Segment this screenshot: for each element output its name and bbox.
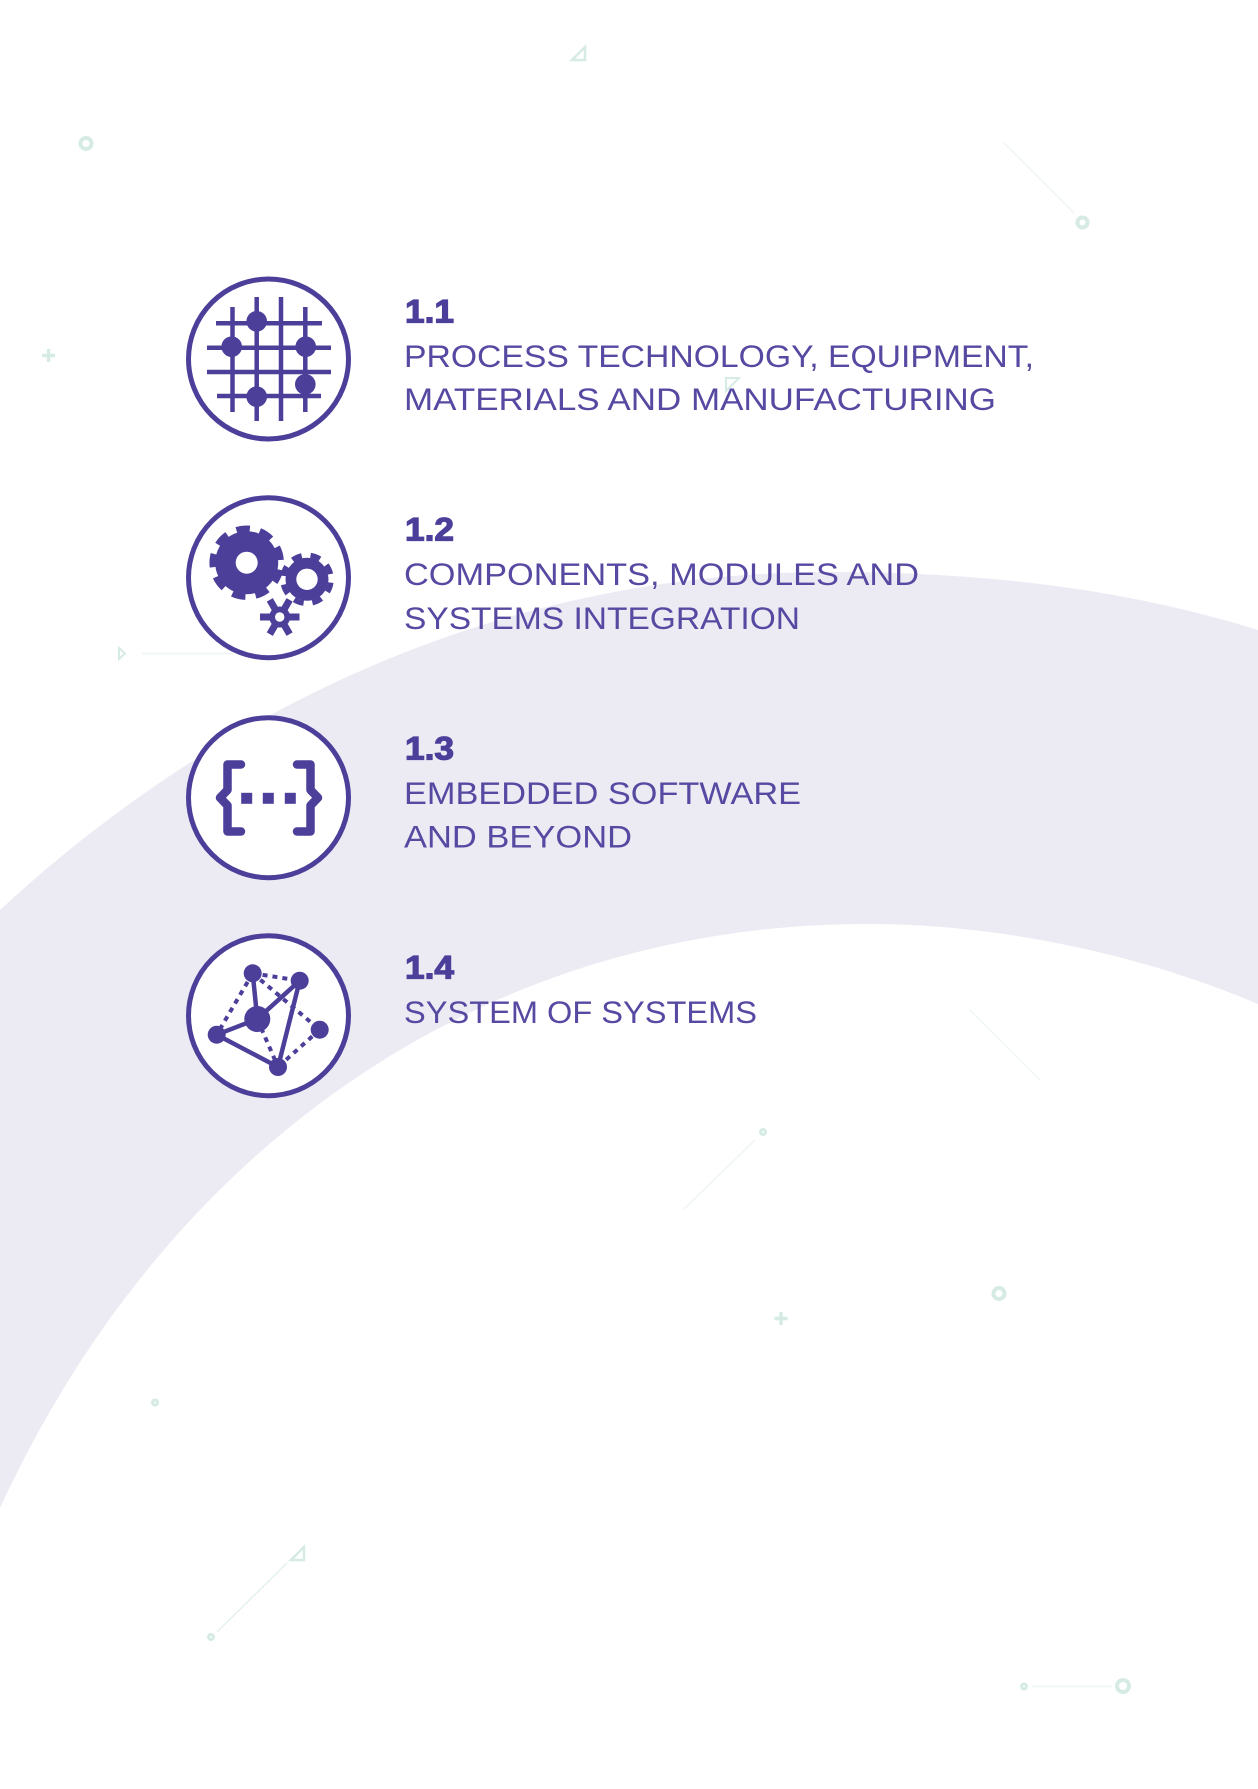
- icon: gears: [188, 498, 348, 658]
- heading 1.3: [404, 731, 801, 854]
- heading 1.3: 1.3: [405, 731, 454, 767]
- heading 1.1: 1.1: [405, 294, 454, 330]
- heading 1.2: [404, 512, 919, 636]
- icon: code braces: [188, 718, 348, 878]
- heading 1.4: 1.4: [405, 950, 454, 986]
- background arc band: [0, 572, 1258, 1508]
- heading 1.3: EMBEDDED SOFTWARE: [404, 775, 801, 811]
- decorative dots, lines and triangles: [42, 47, 1129, 1692]
- icon: network of systems: [188, 936, 348, 1096]
- heading 1.4: SYSTEM OF SYSTEMS: [404, 994, 757, 1030]
- heading 1.4: [404, 950, 757, 1030]
- heading 1.3: AND BEYOND: [404, 818, 632, 854]
- heading 1.2: SYSTEMS INTEGRATION: [404, 600, 800, 636]
- heading 1.2: COMPONENTS, MODULES AND: [404, 556, 919, 592]
- heading 1.1: MATERIALS AND MANUFACTURING: [404, 381, 996, 417]
- heading 1.1: PROCESS TECHNOLOGY, EQUIPMENT,: [404, 338, 1034, 374]
- icon: chip grid: [188, 279, 348, 439]
- heading 1.1: [404, 294, 1034, 417]
- heading 1.2: 1.2: [405, 512, 454, 548]
